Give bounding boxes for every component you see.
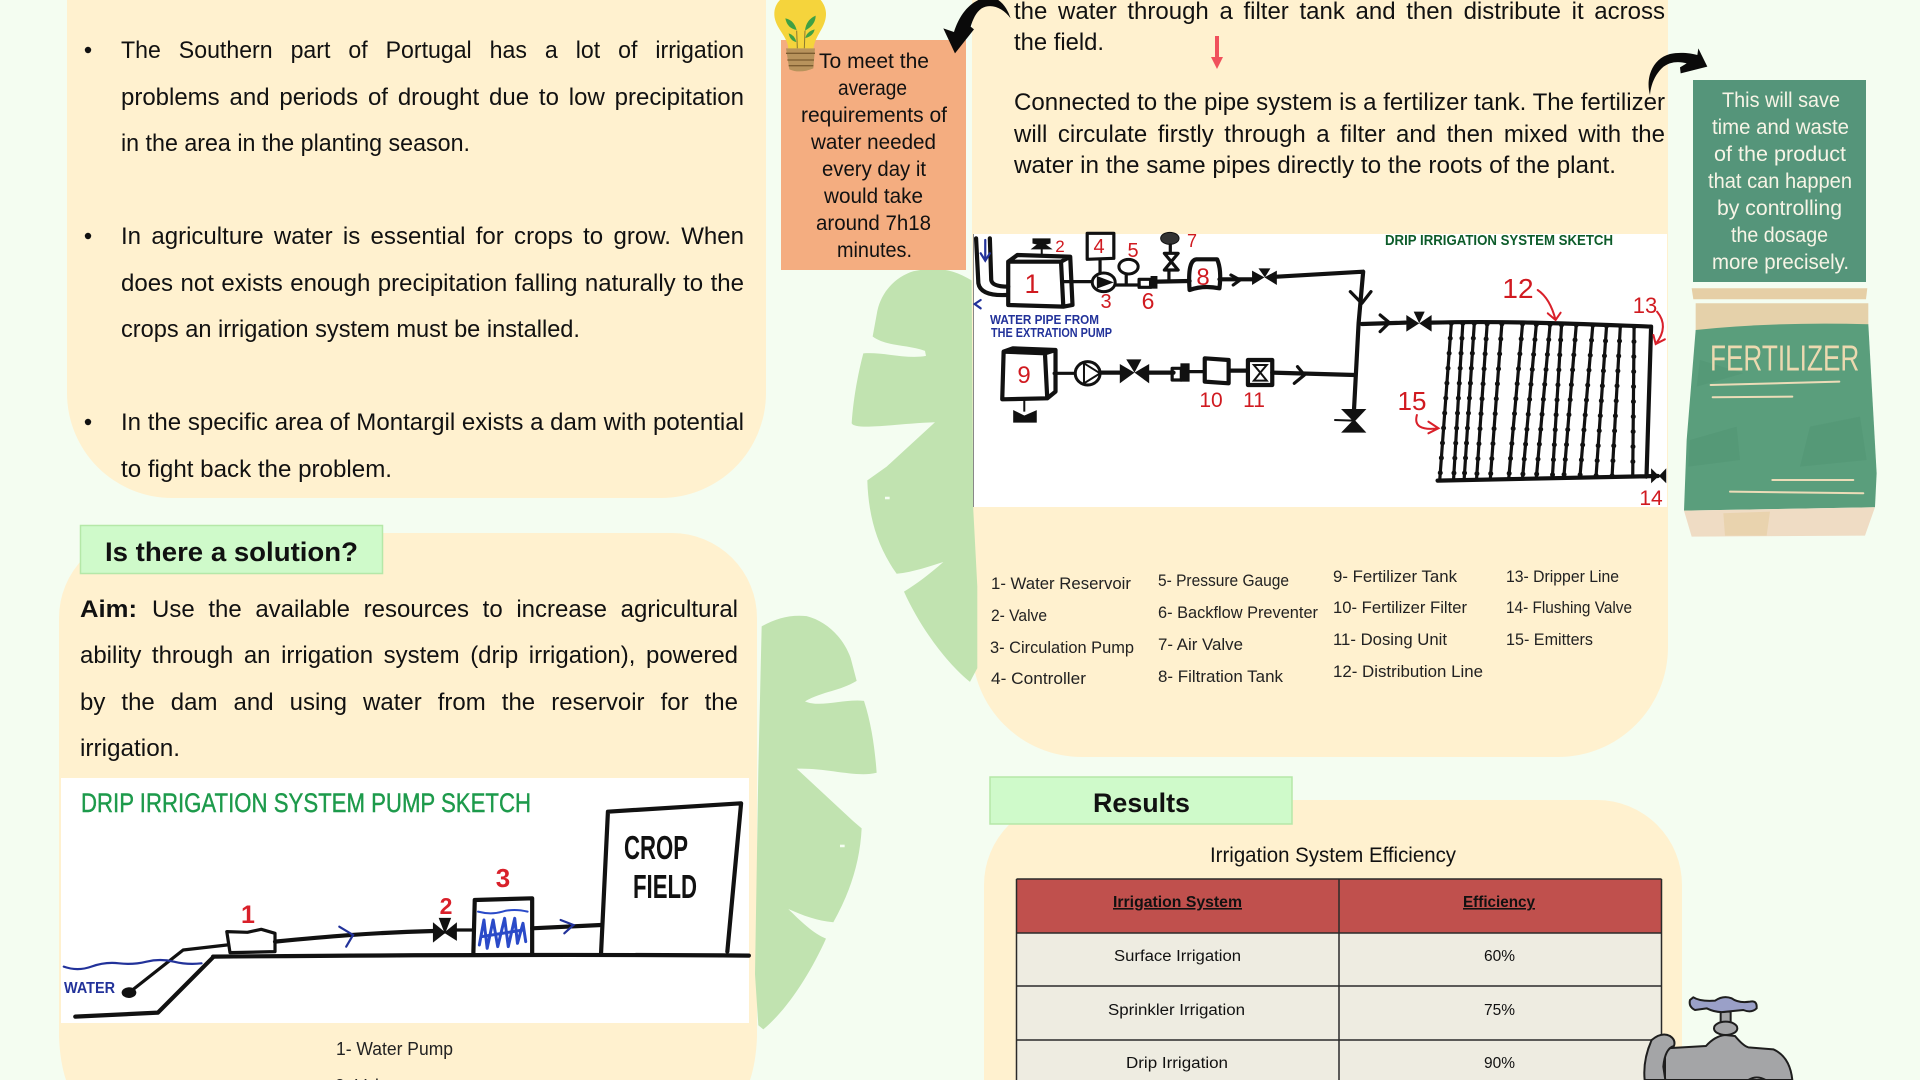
callout: watering time [781, 40, 966, 270]
sketch legend [990, 568, 1632, 688]
pump sketch legend [335, 1039, 453, 1080]
aim text [80, 596, 738, 762]
sketch: drip irrigation system pump: DRIP IRRIGATION SYSTEM PUMP SKETCH [81, 788, 531, 818]
description text: will circulate firstly through a filter and then mixed with the [1013, 121, 1665, 148]
sketch legend: 11- Dosing Unit [1333, 631, 1447, 649]
callout: fertilizer benefit: the dosage [1731, 223, 1828, 247]
sketch legend: 10- Fertilizer Filter [1333, 599, 1468, 617]
sketch legend: 2- Valve [991, 607, 1047, 625]
bullet list: the problem: The Southern part of Portugal has a lot of irrigation [121, 37, 744, 64]
icon: water tap [1644, 997, 1792, 1080]
heading: results [990, 777, 1292, 824]
sketch: drip irrigation system: 15 [1398, 386, 1426, 416]
decorative leaf: lower [755, 616, 877, 1029]
sketch: drip irrigation system: 2 [1055, 237, 1065, 256]
efficiency table: Irrigation System [1113, 894, 1242, 911]
icon: fertilizer bag [1684, 288, 1877, 537]
sketch legend: 3- Circulation Pump [990, 639, 1134, 657]
efficiency table: 60% [1484, 948, 1515, 965]
sketch: drip irrigation system: 8 [1196, 264, 1210, 291]
panel: the solution [59, 533, 757, 1080]
sketch legend: 13- Dripper Line [1506, 568, 1619, 586]
bullet list: the problem: In the specific area of Montargil exists a dam with potential [121, 409, 744, 436]
callout: watering time: water needed [810, 130, 936, 154]
aim text: irrigation. [80, 735, 180, 762]
sketch: drip irrigation system pump: CROP [624, 829, 688, 866]
sketch legend: 14- Flushing Valve [1506, 599, 1632, 617]
aim text: Use the available resources to increase agricultural [152, 596, 738, 623]
description text: the field. [1014, 29, 1104, 56]
bullet list: the problem [85, 37, 744, 483]
bullet list: the problem: crops an irrigation system must be installed. [121, 316, 580, 343]
sketch: drip irrigation system: DRIP IRRIGATION SYSTEM SKETCH [1385, 232, 1613, 249]
sketch legend: 1- Water Reservoir [991, 575, 1132, 593]
sketch: drip irrigation system: 10 [1199, 389, 1223, 412]
arrow: red down arrow [1211, 36, 1223, 69]
callout: watering time: requirements of [801, 103, 947, 127]
callout: watering time: would take [823, 184, 923, 208]
sketch legend: 6- Backflow Preventer [1158, 604, 1318, 622]
efficiency table: 75% [1484, 1002, 1515, 1019]
efficiency table [1016, 879, 1662, 1080]
sketch: drip irrigation system: 7 [1187, 231, 1197, 251]
sketch legend: 15- Emitters [1506, 631, 1593, 649]
sketch legend: 7- Air Valve [1158, 636, 1243, 654]
sketch: drip irrigation system [973, 231, 1667, 510]
sketch legend: 9- Fertilizer Tank [1333, 568, 1458, 586]
arrow: black curved arrow to green note [1649, 48, 1707, 95]
icon: fertilizer bag: FERTILIZER [1710, 338, 1859, 379]
sketch: drip irrigation system pump: FIELD [633, 868, 697, 905]
panel: results [984, 800, 1682, 1080]
decorative leaf: upper [852, 269, 977, 682]
efficiency table: Efficiency [1463, 894, 1535, 911]
efficiency table: Drip Irrigation [1126, 1055, 1228, 1072]
efficiency table: Sprinkler Irrigation [1108, 1002, 1245, 1019]
sketch: drip irrigation system pump [61, 778, 749, 1023]
sketch: drip irrigation system: 5 [1127, 240, 1139, 262]
bullet list: the problem: does not exists enough precipitation falling naturally to the [121, 270, 744, 297]
bullet list: the problem: In agriculture water is essential for crops to grow. When [121, 223, 744, 250]
sketch legend: 5- Pressure Gauge [1158, 572, 1289, 590]
callout: fertilizer benefit: of the product [1714, 142, 1846, 166]
aim text: ability through an irrigation system (drip irrigation), powered [80, 642, 738, 669]
heading: results: Results [1093, 788, 1190, 818]
description text: Connected to the pipe system is a fertilizer tank. The fertilizer [1014, 89, 1665, 116]
sketch: drip irrigation system: 4 [1093, 236, 1105, 258]
callout: watering time: every day it [822, 157, 926, 181]
panel: the problem [67, 0, 766, 498]
callout: watering time: minutes. [837, 238, 912, 262]
callout: fertilizer benefit: more precisely. [1712, 250, 1849, 274]
aim text: by the dam and using water from the reservoir for the [80, 689, 738, 716]
description text: water in the same pipes directly to the roots of the plant. [1013, 152, 1616, 179]
sketch: drip irrigation system pump: 2 [440, 893, 452, 919]
callout: watering time: around 7h18 [816, 211, 931, 235]
bullet list: the problem: to fight back the problem. [121, 456, 392, 483]
heading: is there a solution [80, 526, 382, 574]
bullet list: the problem: in the area in the planting season. [121, 130, 470, 157]
sketch: drip irrigation system: 6 [1142, 288, 1154, 314]
sketch legend: 8- Filtration Tank [1158, 668, 1284, 686]
table title: Irrigation System Efficiency [1210, 844, 1456, 867]
sketch: drip irrigation system pump: 1 [241, 901, 255, 929]
sketch: drip irrigation system: 3 [1100, 291, 1112, 313]
icon: light bulb with leaves [774, 0, 826, 71]
sketch: drip irrigation system: WATER PIPE FROM [990, 312, 1099, 327]
callout: watering time: To meet the [819, 49, 929, 73]
description text [1013, 0, 1665, 179]
callout: fertilizer benefit [1693, 80, 1866, 282]
sketch: drip irrigation system: 11 [1243, 389, 1265, 412]
sketch: drip irrigation system pump: 3 [496, 863, 510, 893]
callout: fertilizer benefit: that can happen [1708, 169, 1852, 193]
sketch legend: 12- Distribution Line [1333, 663, 1483, 681]
sketch: drip irrigation system: 9 [1017, 362, 1031, 389]
heading: is there a solution: Is there a solution? [105, 537, 358, 567]
efficiency table: 90% [1484, 1055, 1515, 1072]
callout: fertilizer benefit: time and waste [1712, 115, 1849, 139]
sketch: drip irrigation system: THE EXTRATION PUMP [991, 325, 1112, 340]
arrow: black curved arrow to orange note [943, 0, 1011, 53]
sketch: drip irrigation system pump: WATER [64, 980, 115, 997]
sketch legend: 4- Controller [991, 670, 1087, 688]
callout: fertilizer benefit: by controlling [1717, 196, 1842, 220]
aim text: Aim: [80, 596, 137, 623]
sketch: drip irrigation system: 13 [1633, 293, 1657, 318]
bullet list: the problem: problems and periods of drought due to low precipitation [121, 84, 744, 111]
pump sketch legend: 1- Water Pump [336, 1039, 453, 1059]
sketch: drip irrigation system: 14 [1639, 487, 1663, 510]
callout: watering time: average [838, 76, 907, 100]
efficiency table: Surface Irrigation [1114, 948, 1241, 965]
panel: system description [972, 0, 1668, 757]
callout: fertilizer benefit: This will save [1722, 88, 1840, 112]
sketch: drip irrigation system: 12 [1502, 273, 1534, 304]
sketch: drip irrigation system: 1 [1024, 269, 1040, 299]
